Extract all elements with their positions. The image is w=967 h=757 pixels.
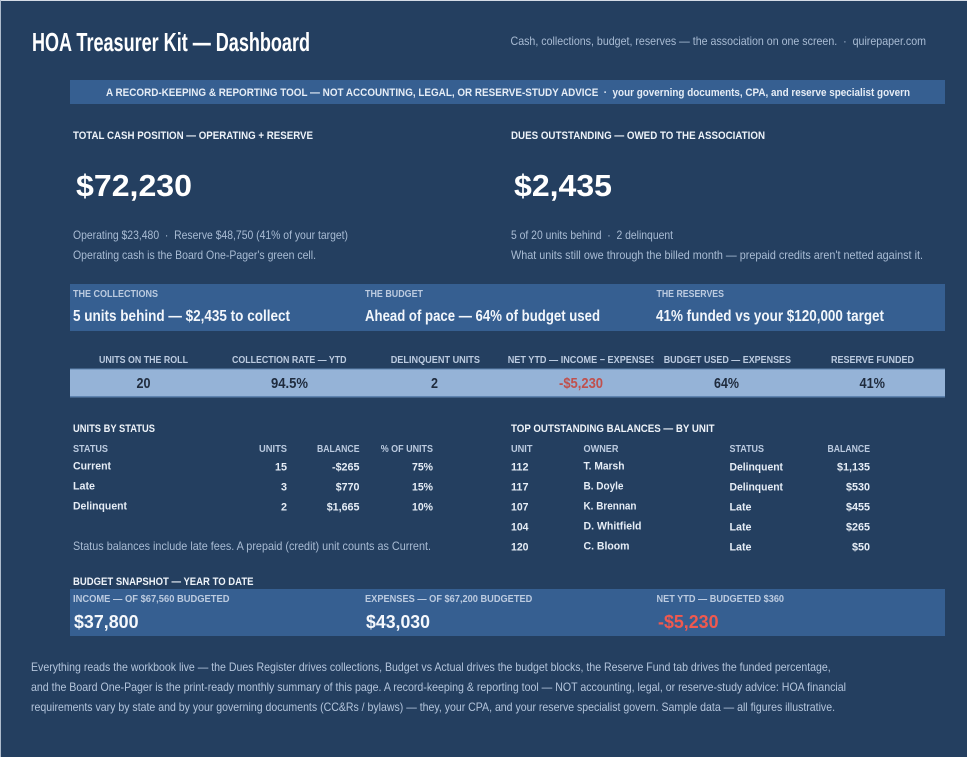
table: balances: 117 xyxy=(511,482,528,494)
title: HOA Treasurer Kit — Dashboard xyxy=(32,27,310,57)
summary: budget xyxy=(365,289,600,325)
table: status: 15% xyxy=(412,482,433,494)
metric: net YTD xyxy=(656,594,784,632)
KPI value band: -$5,230 xyxy=(559,376,603,392)
summary: collections: 5 units behind — $2,435 to collect xyxy=(73,308,291,325)
summary: budget: THE BUDGET xyxy=(365,289,424,300)
summary: reserves: THE RESERVES xyxy=(656,289,724,300)
panel: top outstanding balances xyxy=(511,423,870,554)
metric: expenses: $43,030 xyxy=(366,612,430,632)
table: balances: Late xyxy=(730,502,752,514)
panel: dues outstanding xyxy=(511,130,923,262)
metric: net YTD: NET YTD — BUDGETED $360 xyxy=(656,594,784,605)
table: balances: K. Brennan xyxy=(584,500,637,512)
KPI labels: COLLECTION RATE — YTD xyxy=(232,355,346,366)
big number: total cash: $72,230 xyxy=(76,168,192,203)
KPI value band: 2 xyxy=(431,376,438,392)
table: balances: $50 xyxy=(852,542,870,554)
table: balances: 107 xyxy=(511,502,528,514)
metric: income: $37,800 xyxy=(74,612,138,632)
KPI labels: BUDGET USED — EXPENSES xyxy=(664,355,791,366)
footer note: Everything reads the workbook live — the Dues Register drives collections, Budget vs Actual drives the budget blocks, the Reserve Fund tab drives the funded percentage, xyxy=(31,661,831,674)
footer note: requirements vary by state and by your governing documents (CC&Rs / bylaws) — they, your CPA, and your reserve specialist govern. Sample data — all figures illustrative. xyxy=(31,701,835,714)
KPI labels xyxy=(100,356,914,365)
table: balances: STATUS xyxy=(730,444,764,455)
table: balances xyxy=(511,444,870,554)
metric: net YTD: -$5,230 xyxy=(658,612,718,632)
table: balances: OWNER xyxy=(584,444,619,455)
table: status xyxy=(73,444,433,514)
subtitle: Cash, collections, budget, reserves — the association on one screen. · quirepaper.com xyxy=(510,35,926,48)
heading: budget snapshot: BUDGET SNAPSHOT — YEAR TO DATE xyxy=(73,576,254,588)
table: balances: BALANCE xyxy=(828,444,870,455)
KPI labels: UNITS ON THE ROLL xyxy=(99,355,188,366)
metric: income: INCOME — OF $67,560 BUDGETED xyxy=(73,594,230,605)
summary: collections: THE COLLECTIONS xyxy=(73,289,158,300)
note: units behind: 5 of 20 units behind · 2 delinquent xyxy=(511,229,674,242)
table: balances: $265 xyxy=(846,522,870,534)
table: balances: Late xyxy=(730,542,752,554)
heading: top balances: TOP OUTSTANDING BALANCES — BY UNIT xyxy=(511,423,715,435)
panel: total cash position xyxy=(73,130,348,262)
KPI value band: 41% xyxy=(860,376,885,392)
table: status: 3 xyxy=(281,482,287,494)
table: balances: C. Bloom xyxy=(584,540,630,552)
table: balances: D. Whitfield xyxy=(584,520,642,532)
disclaimer banner xyxy=(70,80,945,104)
table: status: UNITS xyxy=(259,444,287,455)
KPI value band: 94.5% xyxy=(271,376,308,392)
table: status: 15 xyxy=(275,462,287,474)
KPI value band: 20 xyxy=(136,376,150,392)
KPI labels: NET YTD — INCOME − EXPENSES xyxy=(508,355,657,366)
KPI value band xyxy=(70,368,945,398)
metric: expenses: EXPENSES — OF $67,200 BUDGETED xyxy=(365,594,532,605)
table: balances: $1,135 xyxy=(837,462,870,474)
metric: expenses xyxy=(365,594,532,632)
table: status: BALANCE xyxy=(317,444,360,455)
table: balances: Delinquent xyxy=(730,462,783,474)
table: balances: UNIT xyxy=(511,444,533,455)
note: what units owe: What units still owe through the billed month — prepaid credits aren't netted against it. xyxy=(511,249,923,262)
table: balances: 104 xyxy=(511,522,529,534)
heading: total cash: TOTAL CASH POSITION — OPERATING + RESERVE xyxy=(73,130,313,142)
KPI labels: RESERVE FUNDED xyxy=(831,355,914,366)
table: status: $770 xyxy=(336,482,360,494)
heading: units by status: UNITS BY STATUS xyxy=(73,423,155,435)
table: status: 2 xyxy=(281,502,287,514)
table: balances: $455 xyxy=(846,502,870,514)
heading: dues: DUES OUTSTANDING — OWED TO THE ASSOCIATION xyxy=(511,130,765,142)
big number: dues: $2,435 xyxy=(514,168,612,203)
summary: collections xyxy=(73,289,291,325)
table: balances: T. Marsh xyxy=(584,460,625,472)
table: balances: 120 xyxy=(511,542,528,554)
summary: reserves: 41% funded vs your $120,000 target xyxy=(656,308,885,325)
note: cash breakdown: Operating $23,480 · Reserve $48,750 (41% of your target) xyxy=(73,229,348,242)
metric: income xyxy=(73,594,230,632)
table: balances: $530 xyxy=(846,482,870,494)
summary: reserves xyxy=(656,289,885,325)
table: status: -$265 xyxy=(332,462,360,474)
note: operating cash: Operating cash is the Board One-Pager's green cell. xyxy=(73,249,316,262)
summary: budget: Ahead of pace — 64% of budget used xyxy=(365,308,600,325)
table: status: 10% xyxy=(412,502,433,514)
KPI value band: 64% xyxy=(714,376,739,392)
table: balances: Delinquent xyxy=(730,482,783,494)
panel: units by status xyxy=(73,423,433,553)
table: status: STATUS xyxy=(73,444,108,455)
table: balances: B. Doyle xyxy=(584,480,624,492)
table: status: Late xyxy=(73,480,95,492)
panel: budget snapshot xyxy=(70,589,945,636)
panel: summary strip xyxy=(70,284,945,331)
KPI labels: DELINQUENT UNITS xyxy=(391,355,480,366)
table: status: $1,665 xyxy=(327,502,360,514)
table: status: Delinquent xyxy=(73,500,127,512)
note: status balances: Status balances include late fees. A prepaid (credit) unit counts as Current. xyxy=(73,540,431,553)
table: status: % OF UNITS xyxy=(381,444,433,455)
table: balances: Late xyxy=(730,522,752,534)
table: status: 75% xyxy=(412,462,433,474)
footer note xyxy=(31,661,846,714)
footer note: and the Board One-Pager is the print-ready monthly summary of this page. A record-keeping & reporting tool — NOT accounting, legal, or reserve-study advice: HOA financial xyxy=(31,681,846,694)
table: balances: 112 xyxy=(511,462,528,474)
table: status: Current xyxy=(73,460,111,472)
